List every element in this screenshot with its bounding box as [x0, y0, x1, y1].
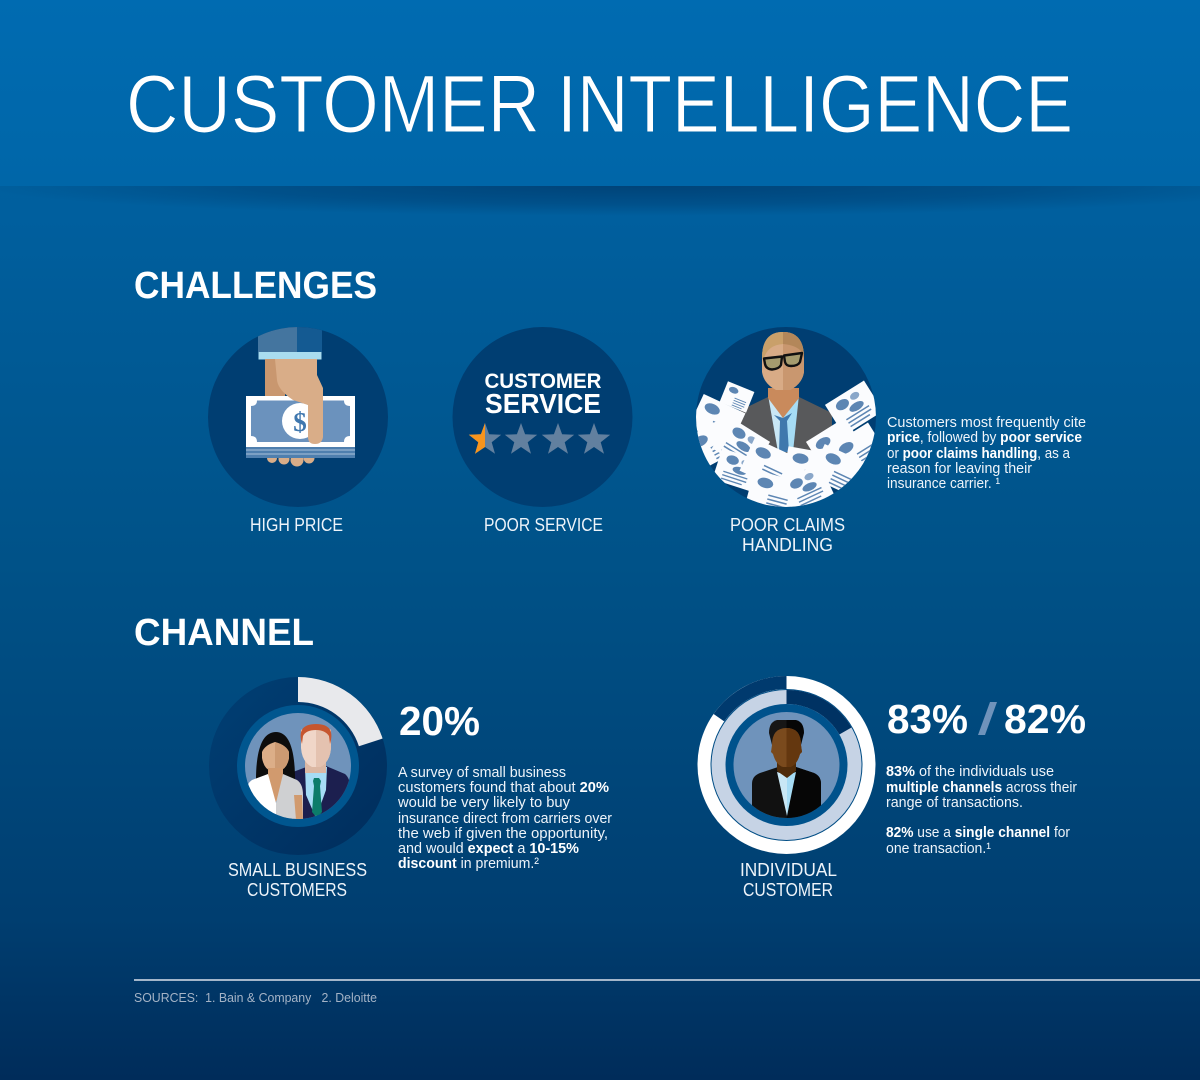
text: individual customer description: range of transactions. — [886, 794, 1023, 811]
text: small business description: the web if given the opportunity, — [398, 825, 608, 842]
label: small business customers — [228, 860, 367, 900]
customer service wordmark — [484, 370, 602, 419]
panel: high price — [208, 320, 388, 507]
donut segment: outer remainder — [714, 676, 786, 721]
heading: channel: CHANNEL — [134, 612, 314, 654]
glasses — [764, 353, 802, 370]
title: CUSTOMER — [126, 59, 540, 150]
text: small business description: would be very likely to buy — [397, 794, 570, 811]
text: small business description: customers found that about 20% — [398, 779, 609, 796]
stat: 83% / 82% — [887, 696, 1086, 742]
text: individual customer description: one transaction.¹ — [886, 840, 991, 857]
label: small business customers: SMALL BUSINESS — [228, 860, 367, 880]
icon: individual man — [752, 720, 821, 820]
text: challenges explanation: or poor claims handling, as a — [887, 445, 1071, 462]
sources: SOURCES: 1. Bain & Company 2. Deloitte — [134, 990, 377, 1005]
text: small business description: A survey of small business — [398, 764, 566, 781]
text: small business description — [397, 764, 612, 872]
text: small business description: insurance direct from carriers over — [398, 810, 612, 827]
icon: man buried in paper — [696, 332, 876, 507]
icon: hand holding money — [246, 320, 355, 466]
text: challenges explanation: reason for leaving their — [887, 460, 1032, 477]
text: small business description: discount in premium.² — [398, 855, 539, 872]
donut segment: inner remainder — [786, 690, 852, 734]
chart: small business donut 20% — [209, 677, 387, 855]
text: challenges explanation: insurance carrier. ¹ — [887, 475, 1000, 492]
stat: 83% / 82%: 82% — [1004, 696, 1086, 742]
text: individual customer description: 82% use a single channel for — [886, 824, 1070, 841]
text: small business description: and would expect a 10-15% — [398, 840, 579, 857]
label: poor service: POOR SERVICE — [484, 515, 603, 535]
chart: individual customer double donut 83% / 82% — [698, 676, 876, 854]
text: challenges explanation: Customers most frequently cite — [887, 414, 1086, 431]
icon: business man and woman — [248, 724, 349, 819]
text: individual customer description: multiple channels across their — [886, 779, 1077, 796]
customer service wordmark: CUSTOMER — [484, 370, 602, 393]
panel: poor service — [452, 327, 632, 507]
label: individual customer: INDIVIDUAL — [740, 860, 837, 880]
heading: challenges: CHALLENGES — [134, 265, 377, 307]
label: poor claims handling: POOR CLAIMS — [730, 515, 845, 535]
text: individual customer description: 83% of the individuals use — [886, 763, 1054, 780]
text: individual customer description — [886, 763, 1077, 857]
icon: star rating — [469, 423, 610, 454]
stat: 20%: 20% — [399, 698, 480, 744]
donut segment: 20% — [298, 677, 383, 746]
header band — [0, 0, 1200, 216]
panel: poor claims handling — [696, 327, 876, 507]
label: individual customer — [740, 860, 837, 900]
icon: hand holding money: $ — [293, 407, 307, 437]
text: challenges explanation: price, followed by poor service — [887, 429, 1082, 446]
label: poor claims handling — [730, 515, 845, 555]
stat: 83% / 82%: 83% — [887, 696, 968, 742]
customer service wordmark: SERVICE — [485, 388, 601, 419]
text: challenges explanation — [887, 414, 1086, 492]
label: poor claims handling: HANDLING — [742, 535, 833, 555]
label: high price: HIGH PRICE — [250, 515, 343, 535]
label: small business customers: CUSTOMERS — [247, 880, 347, 900]
title — [126, 59, 1073, 150]
title: INTELLIGENCE — [557, 59, 1073, 150]
label: individual customer: CUSTOMER — [743, 880, 833, 900]
